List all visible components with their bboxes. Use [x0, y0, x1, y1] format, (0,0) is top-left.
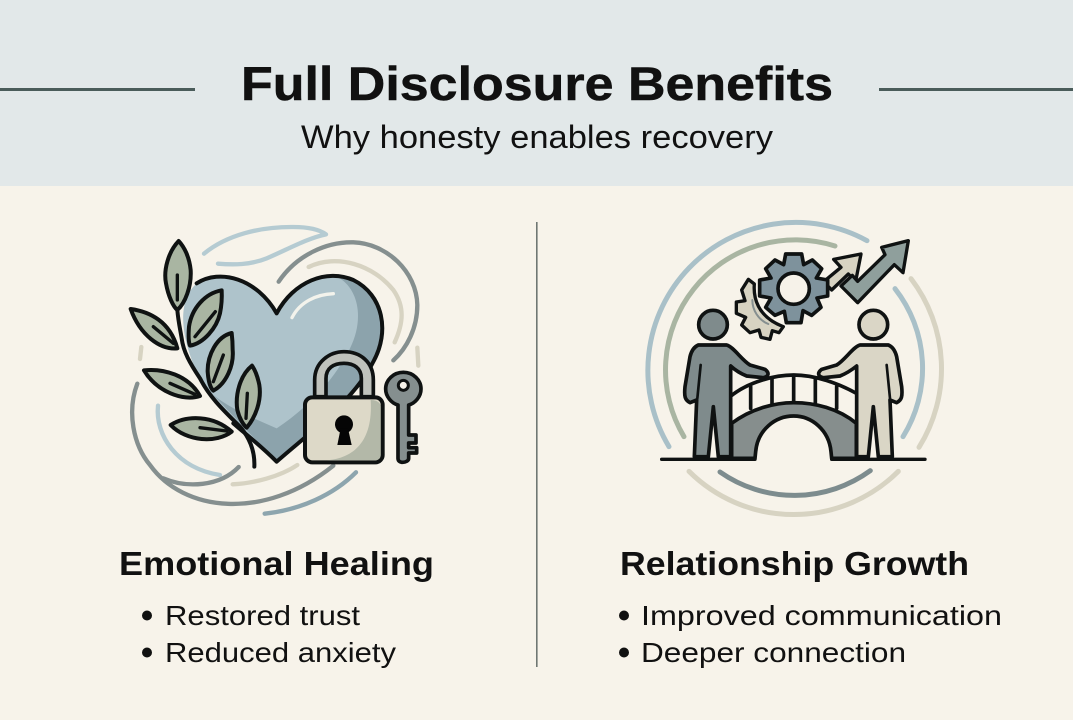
swirl lines	[132, 227, 418, 514]
icon: two people on a bridge with gears and arrows	[648, 222, 942, 515]
leaves	[131, 241, 260, 467]
heading: relationship growth: Relationship Growth	[620, 545, 969, 582]
large gear	[760, 254, 828, 323]
small gear	[736, 279, 783, 339]
header band	[0, 0, 1073, 186]
bullet list: relationship growth: Deeper connection	[641, 637, 906, 668]
title: Full Disclosure Benefits	[241, 57, 833, 110]
subtitle: Why honesty enables recovery	[301, 119, 773, 155]
panel: emotional healing	[119, 227, 434, 668]
bullet list: emotional healing: Restored trust	[165, 600, 360, 631]
padlock	[305, 352, 383, 462]
bullet list: emotional healing: Reduced anxiety	[165, 637, 396, 668]
heart	[183, 276, 382, 462]
bridge	[730, 375, 856, 458]
bullet list: relationship growth	[619, 600, 1002, 668]
person right	[819, 310, 902, 457]
bullet list: relationship growth: Improved communication	[641, 600, 1002, 631]
key	[386, 372, 421, 462]
ground line	[662, 454, 925, 464]
bullet list: emotional healing	[142, 600, 396, 668]
person left	[685, 310, 768, 457]
arrows	[824, 241, 908, 303]
panel: relationship growth	[619, 222, 1002, 668]
icon: heart, leaves, lock and key	[131, 227, 421, 514]
outer arcs	[648, 222, 942, 515]
heading: emotional healing: Emotional Healing	[119, 545, 434, 582]
